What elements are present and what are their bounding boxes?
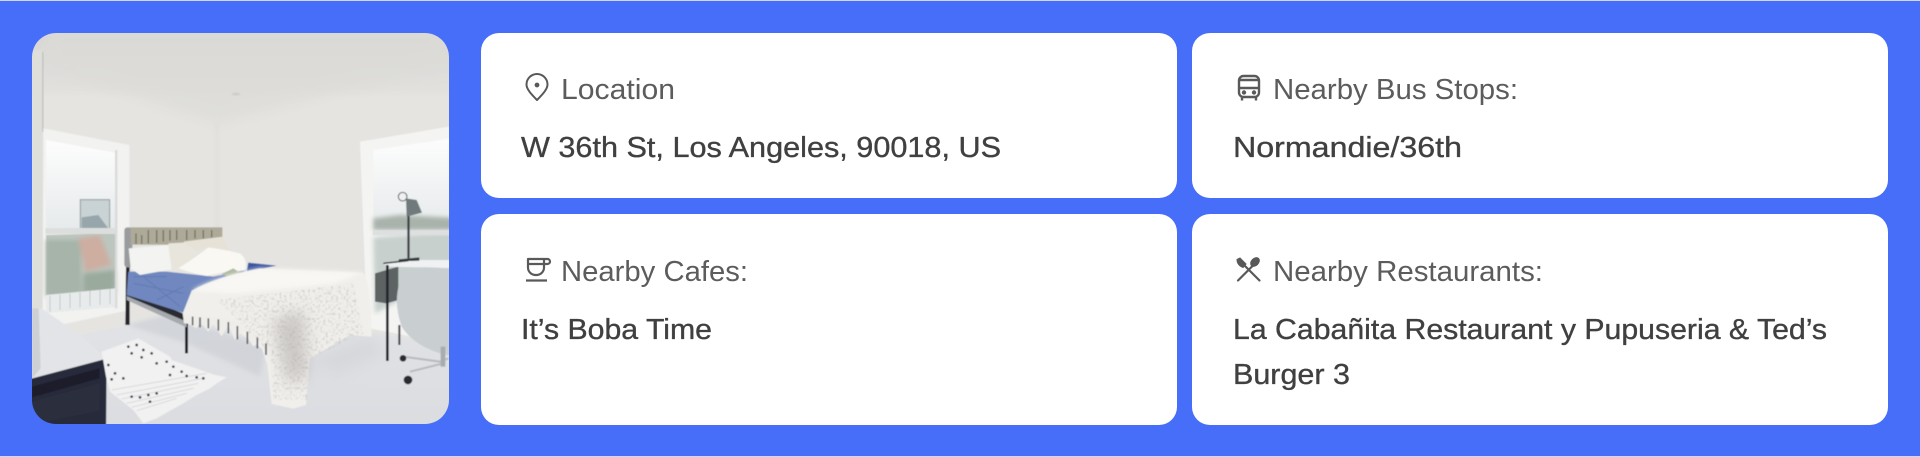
right window	[360, 126, 449, 336]
label: location: Location	[561, 74, 675, 106]
walls and ceiling	[32, 33, 449, 340]
icon: bus	[1239, 76, 1259, 100]
value: location address: W 36th St, Los Angeles, 90018, US	[521, 132, 1001, 164]
value: bus stop: Normandie/36th	[1233, 132, 1462, 164]
icon: coffee cup	[526, 259, 550, 280]
icon: map pin	[526, 74, 548, 100]
card: nearby bus stops	[1192, 33, 1888, 198]
value: restaurants	[1233, 314, 1827, 391]
dresser	[32, 308, 107, 424]
floor	[106, 384, 449, 424]
value: restaurants: La Cabañita Restaurant y Pupuseria & Ted’s	[1233, 314, 1827, 346]
card: location	[481, 33, 1177, 198]
left window	[43, 128, 129, 325]
value: restaurants: Burger 3	[1233, 359, 1350, 391]
bed	[124, 227, 372, 409]
value: cafe: It’s Boba Time	[521, 314, 712, 346]
icon: fork and spoon	[1237, 256, 1261, 280]
label: nearby bus stops: Nearby Bus Stops:	[1273, 74, 1518, 106]
label: nearby restaurants: Nearby Restaurants:	[1273, 256, 1543, 288]
panel: bedroom photo	[32, 33, 449, 424]
label: nearby cafes: Nearby Cafes:	[561, 256, 748, 288]
card: nearby cafes	[481, 214, 1177, 425]
desk, lamp and chair	[374, 191, 449, 385]
rug	[102, 338, 227, 423]
card: nearby restaurants	[1192, 214, 1888, 425]
blanket fringe	[193, 317, 266, 355]
